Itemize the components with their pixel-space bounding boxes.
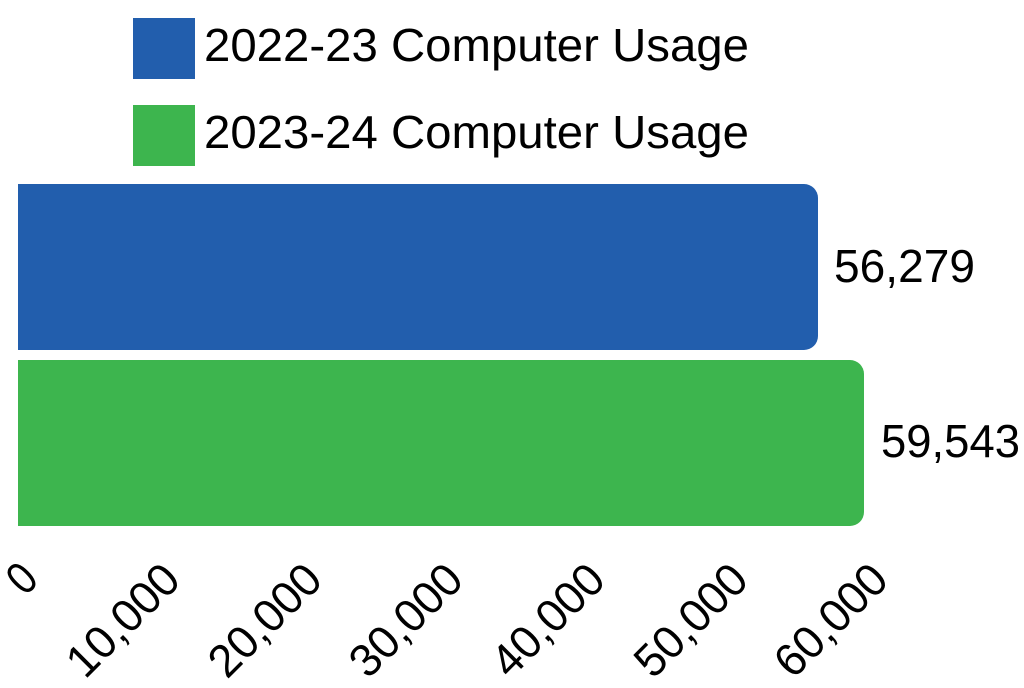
axis label: 60,000: 60,000 xyxy=(763,553,898,687)
value label: 56,279: 56,279 xyxy=(834,240,975,292)
legend xyxy=(133,18,749,166)
axis label: 20,000: 20,000 xyxy=(197,553,332,687)
x axis labels xyxy=(0,552,898,687)
axis label: 40,000: 40,000 xyxy=(480,553,615,687)
legend label: 2022-23: 2022-23 Computer Usage xyxy=(204,19,749,71)
bar: 2022-23 xyxy=(18,184,818,350)
legend swatch: 2022-23 xyxy=(133,18,195,79)
legend swatch: 2023-24 xyxy=(133,105,195,166)
axis label: 30,000: 30,000 xyxy=(338,553,473,687)
axis label: 50,000: 50,000 xyxy=(623,553,758,687)
bar: 2023-24 xyxy=(18,360,864,526)
axis label: 10,000: 10,000 xyxy=(55,553,190,687)
value label: 59,543: 59,543 xyxy=(881,415,1020,467)
legend label: 2023-24: 2023-24 Computer Usage xyxy=(204,106,749,158)
